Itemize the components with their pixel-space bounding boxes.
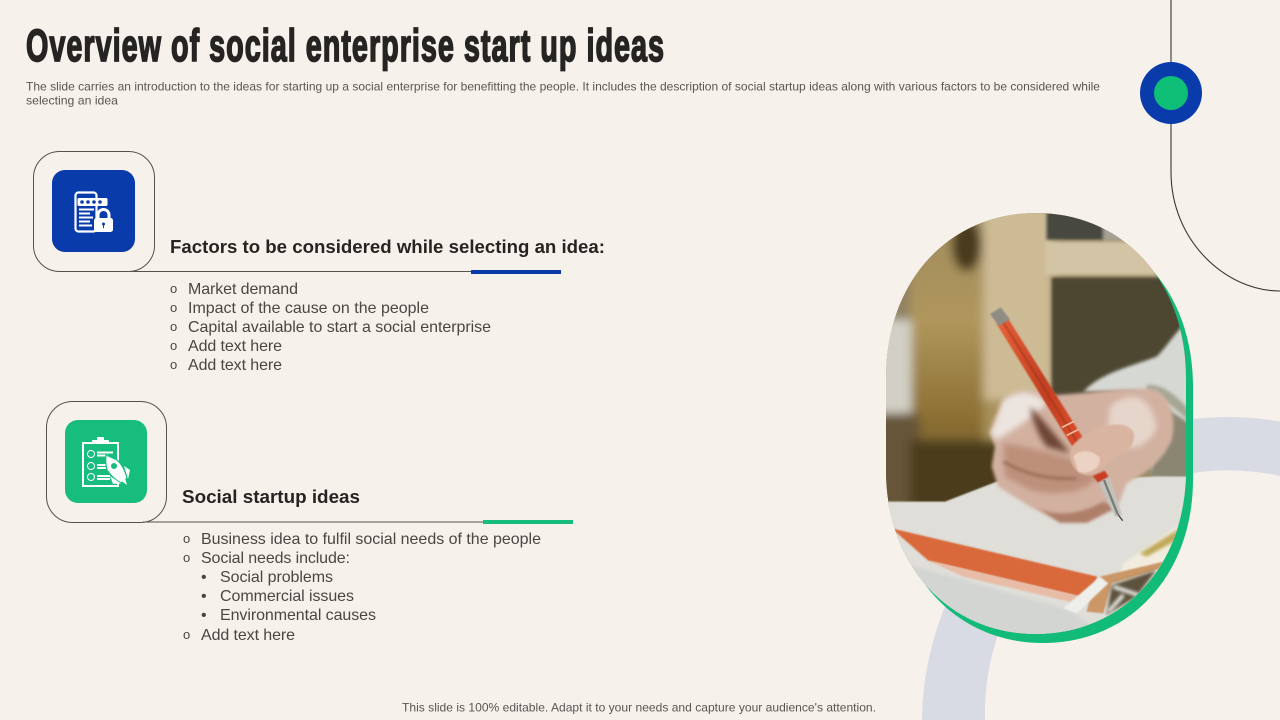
list: factors: Add text here xyxy=(188,357,282,374)
sleeve xyxy=(1082,326,1186,482)
list: social startup ideas: o xyxy=(183,627,190,642)
list: factors: o xyxy=(170,281,177,296)
list: factors: Market demand xyxy=(188,281,298,298)
list: social startup ideas: Business idea to fulfil social needs of the people xyxy=(201,531,541,548)
photo: hand writing with a red pen xyxy=(886,213,1186,634)
list: factors: o xyxy=(170,338,177,353)
panel: social startup ideas xyxy=(46,402,573,644)
list: factors: Capital available to start a social enterprise xyxy=(188,319,491,336)
list: factors: Add text here xyxy=(188,338,282,355)
list: social startup ideas: Commercial issues xyxy=(220,588,354,605)
description text: The slide carries an introduction to the ideas for starting up a social enterprise for benefitting the people. It includes the description of social startup ideas along with various factors to be considered while xyxy=(26,80,1100,94)
list: factors: o xyxy=(170,319,177,334)
list: social startup ideas: Add text here xyxy=(201,627,295,644)
list: social startup ideas: Environmental causes xyxy=(220,607,376,624)
list: social startup ideas: • xyxy=(201,569,207,586)
list: social startup ideas: o xyxy=(183,550,190,565)
description text xyxy=(26,80,1100,108)
list: factors: Impact of the cause on the people xyxy=(188,300,429,317)
photo: green backing shape xyxy=(893,222,1193,643)
decorative grey ring xyxy=(922,417,1280,720)
list: factors xyxy=(170,281,491,374)
heading: social startup ideas: Social startup ideas xyxy=(182,487,360,507)
thumb over pen xyxy=(1070,425,1134,475)
list: social startup ideas: o xyxy=(183,531,190,546)
notebook page xyxy=(888,476,1186,634)
title: Overview of social enterprise start up ideas xyxy=(26,22,664,72)
heading: factors: Factors to be considered while selecting an idea: xyxy=(170,237,605,257)
panel: factors to be considered xyxy=(34,152,605,374)
hand xyxy=(990,389,1174,522)
list: social startup ideas: • xyxy=(201,588,207,605)
icon: phone with password and padlock xyxy=(52,170,135,252)
icon: frame and underline xyxy=(34,152,561,274)
list: social startup ideas xyxy=(183,531,541,644)
book edge xyxy=(892,528,1097,598)
list: social startup ideas: • xyxy=(201,607,207,624)
list: factors: o xyxy=(170,300,177,315)
footer note: This slide is 100% editable. Adapt it to your needs and capture your audience's attention. xyxy=(402,700,876,714)
list: social startup ideas: Social problems xyxy=(220,569,333,586)
icon: frame and underline xyxy=(46,402,573,524)
decorative connector line xyxy=(1171,0,1280,291)
list: social startup ideas: Social needs include: xyxy=(201,550,350,567)
decorative target circle xyxy=(1140,62,1202,124)
icon: clipboard with rocket xyxy=(65,420,147,503)
pen xyxy=(997,317,1083,446)
list: factors: o xyxy=(170,357,177,372)
description text: selecting an idea xyxy=(26,94,118,108)
